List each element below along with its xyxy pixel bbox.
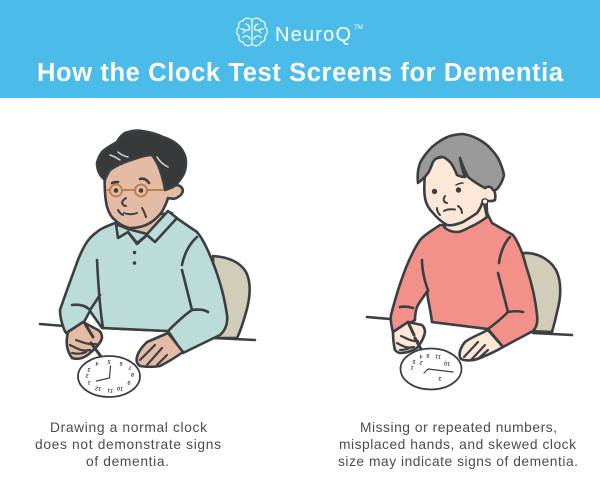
chair xyxy=(523,253,560,332)
clock: impaired: 3 xyxy=(438,375,442,381)
clock: impaired xyxy=(400,348,462,390)
collar xyxy=(116,211,177,243)
clock: impaired: 5 xyxy=(412,358,416,364)
clock: impaired: 2 xyxy=(419,359,423,365)
shirt buttons xyxy=(133,251,136,265)
nose, mouth, wrinkles xyxy=(118,198,146,217)
clock: impaired: 1 xyxy=(410,364,414,370)
eyebrow xyxy=(456,183,463,185)
figure: man drawing normal clock xyxy=(40,131,255,397)
shirt xyxy=(60,215,227,353)
clock: normal: 7 xyxy=(128,364,132,370)
caption: impaired clock: size may indicate signs of dementia. xyxy=(338,454,578,469)
left hand xyxy=(393,322,425,353)
caption: impaired clock: Missing or repeated numbers, xyxy=(360,420,557,435)
caption: impaired clock: misplaced hands, and skewed clock xyxy=(339,437,576,452)
clock: normal: 5 xyxy=(107,358,111,364)
pen xyxy=(408,322,423,353)
clock: impaired: 10 xyxy=(444,360,451,367)
caption: impaired clock xyxy=(338,420,578,469)
pen xyxy=(84,322,105,362)
clock: impaired: 11 xyxy=(435,353,442,359)
earring xyxy=(487,203,488,215)
caption: normal clock: of dementia. xyxy=(86,454,169,469)
shirt details xyxy=(72,237,208,331)
title: How the Clock Test Screens for Dementia xyxy=(37,59,564,87)
clock: normal: 2 xyxy=(85,372,89,378)
nose, mouth, wrinkles xyxy=(437,196,462,215)
figure: woman drawing impaired clock xyxy=(367,134,572,390)
clock: normal: 11 xyxy=(107,387,114,393)
eyes xyxy=(432,187,461,194)
clock: normal: 12 xyxy=(95,385,102,392)
clock: impaired: 4 xyxy=(418,353,423,359)
clock: normal: 3 xyxy=(87,366,91,372)
right hand xyxy=(460,330,503,360)
clock: normal xyxy=(78,356,140,397)
clock: normal: 4 xyxy=(94,360,99,366)
hair xyxy=(418,134,504,190)
hair highlights xyxy=(110,152,168,167)
glasses xyxy=(107,184,163,196)
hair xyxy=(97,131,186,190)
clock: impaired: 9 xyxy=(426,352,430,358)
clock: normal: 8 xyxy=(131,371,135,377)
neck xyxy=(128,213,172,244)
left hand xyxy=(67,322,102,359)
right hand xyxy=(137,333,183,367)
clock: normal: 6 xyxy=(119,360,123,366)
eyebrows xyxy=(112,179,149,183)
face xyxy=(424,150,495,225)
clock: normal: 1 xyxy=(87,379,91,385)
table edge xyxy=(40,324,255,340)
clock: normal: 9 xyxy=(127,379,131,385)
sweater xyxy=(391,215,537,347)
caption: normal clock: does not demonstrate signs xyxy=(35,437,221,452)
table edge xyxy=(367,317,572,335)
header banner xyxy=(0,0,600,98)
logo wordmark: TM xyxy=(354,25,363,31)
eyes xyxy=(114,188,143,193)
caption: normal clock xyxy=(35,420,221,469)
face xyxy=(105,150,183,228)
neck and collar xyxy=(444,203,487,232)
sweater details xyxy=(400,237,523,329)
clock: normal: 10 xyxy=(117,385,124,392)
icon: brain logo xyxy=(237,18,267,46)
caption: normal clock: Drawing a normal clock xyxy=(50,420,207,435)
logo wordmark: NeuroQ xyxy=(275,24,351,46)
chair xyxy=(213,256,250,338)
